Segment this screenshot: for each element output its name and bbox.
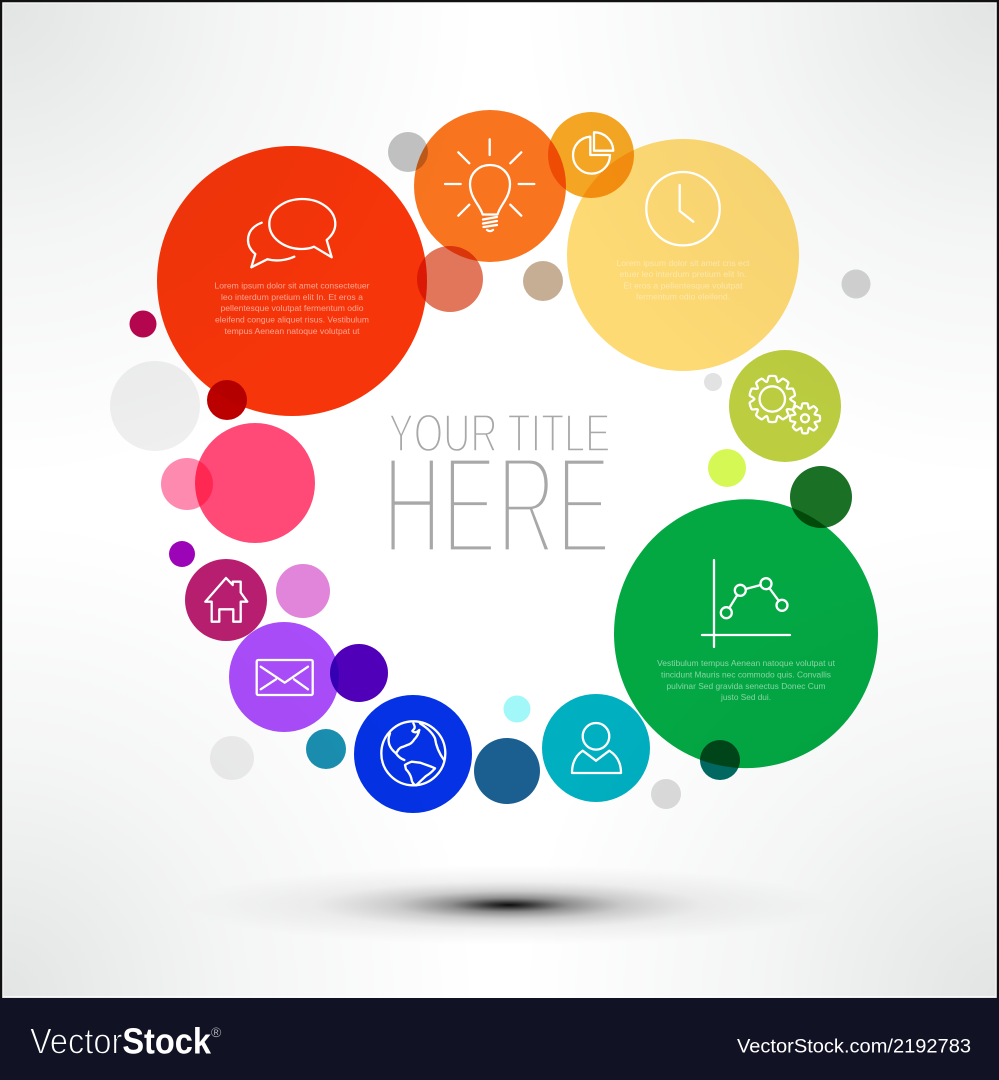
dot: brick: [417, 246, 483, 312]
panel: teal user: [542, 694, 650, 802]
panel: violet mail: [229, 622, 339, 732]
green body text: Vestibulum tempus Aenean natoque volutpat ut: [657, 658, 836, 668]
dot: dark teal: [700, 740, 740, 780]
icon: speech bubbles: [248, 199, 335, 267]
yellow body text: [616, 258, 750, 302]
dot: gray bottom: [651, 779, 681, 809]
dot: pale gray large: [110, 361, 200, 451]
panel: blue globe: [354, 695, 472, 813]
red body text: eleifend congue aliquet risus. Vestibulum: [215, 314, 369, 324]
panel: yellow clock: [567, 139, 799, 371]
yellow body text: Lorem ipsum dolor sit amet cns ect: [616, 258, 750, 268]
dot: tan: [523, 261, 563, 301]
dot: orchid: [276, 564, 330, 618]
panel: magenta home: [185, 559, 267, 641]
panel: olive gears: [729, 350, 841, 462]
icon: gears: [749, 376, 820, 433]
dot: light cyan: [504, 696, 530, 722]
icon: light bulb: [445, 139, 534, 231]
dot: dark red: [207, 380, 247, 420]
title line: here: HERE: [382, 428, 611, 584]
magenta circle: [185, 559, 267, 641]
dot: navy: [474, 738, 540, 804]
red body text: leo interdum pretium elit In. Et eros a: [221, 292, 363, 302]
footer logo: VectorStock: [30, 1020, 212, 1062]
panel: orange idea: [414, 110, 566, 262]
dot: gray top: [388, 132, 428, 172]
red body text: tempus Aenean natoque volutpat ut: [224, 326, 360, 336]
yellow circle: [567, 139, 799, 371]
dot: pale gray small: [704, 373, 722, 391]
green body text: justo Sed dui.: [720, 692, 771, 702]
orange circle: [414, 110, 566, 262]
violet circle: [229, 622, 339, 732]
dot: purple: [169, 541, 195, 567]
green body text: pulvinar Sed gravida senectus Donec Cum: [666, 681, 826, 691]
dot: crimson: [130, 310, 156, 338]
dot: indigo: [330, 644, 388, 702]
red body text: [214, 281, 370, 336]
icon: user: [572, 723, 621, 773]
dot: gray right: [842, 270, 870, 298]
ground shadow: [184, 865, 834, 945]
icon: clock: [646, 172, 720, 245]
blue circle: [354, 695, 472, 813]
yellow body text: etuer leo interdum pretium elit In.: [620, 269, 746, 279]
dot: teal small: [306, 729, 346, 769]
panel: pink blank: [195, 423, 315, 543]
red circle: [157, 146, 427, 416]
title: [382, 403, 611, 584]
icon: envelope: [257, 660, 313, 695]
dot: lime: [708, 449, 746, 487]
panel: green chart: [614, 499, 878, 768]
icon: pie chart: [573, 132, 613, 174]
green body text: [657, 658, 836, 702]
title line: your title: YOUR TITLE: [388, 403, 610, 463]
panel: red speech: [157, 146, 427, 416]
red body text: Lorem ipsum dolor sit amet consectetuer: [214, 281, 370, 291]
yellow body text: Et eros a pellentesque volutpat: [624, 280, 743, 290]
green circle: [614, 499, 878, 768]
green body text: tincidunt Mauris nec commodo quis. Convallis: [661, 669, 831, 679]
registered mark: ®: [211, 1024, 222, 1040]
footer url: VectorStock.com/2192783: [737, 1037, 971, 1058]
teal circle: [542, 694, 650, 802]
amber circle: [548, 112, 634, 198]
yellow body text: fermentum odio eleifend.: [636, 292, 730, 302]
red body text: pellentesque volutpat fermentum odio: [220, 303, 364, 313]
icon: line chart: [702, 560, 790, 647]
dot: light pink: [161, 458, 213, 510]
accent dots: [110, 132, 870, 809]
dot: dark green: [790, 466, 852, 528]
icon: globe: [381, 721, 445, 785]
dot: pale gray bottom left: [210, 736, 254, 780]
olive circle: [729, 350, 841, 462]
icon: house: [205, 578, 247, 622]
panel: amber chart: [548, 112, 634, 198]
footer bar: [0, 998, 999, 1080]
